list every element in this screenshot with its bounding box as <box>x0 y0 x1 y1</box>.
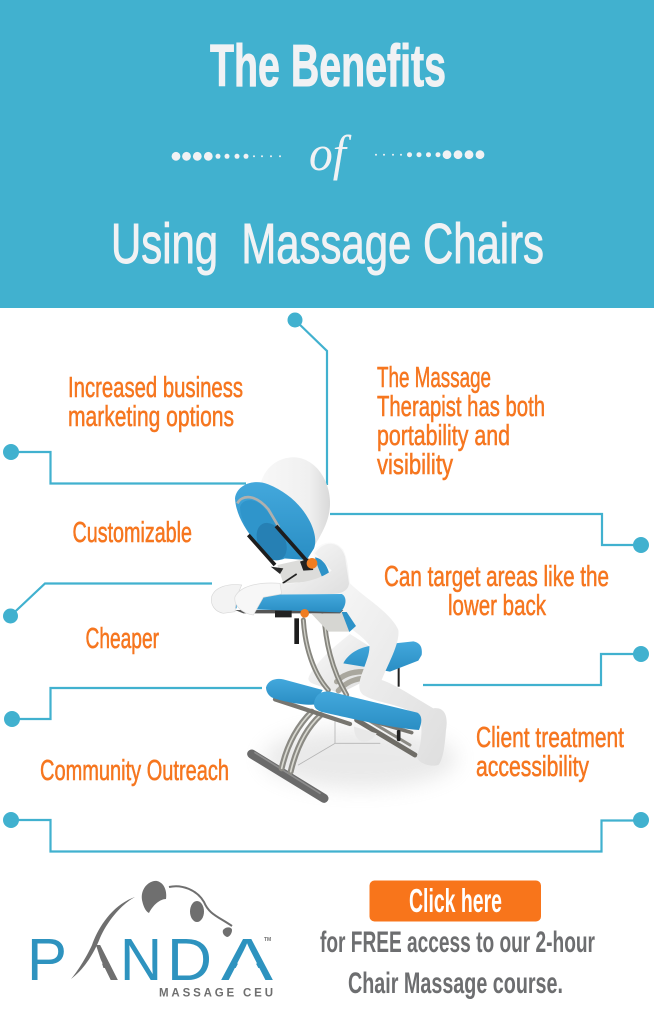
label: Cheaper: Cheaper <box>86 623 159 655</box>
logo wordmark: A <box>68 927 119 993</box>
label: Client treatment accessibility <box>476 722 624 783</box>
figure torso and near leg <box>313 543 447 766</box>
near arm <box>280 544 349 595</box>
button: Click here: Click here <box>409 882 502 919</box>
call to action <box>320 880 595 1000</box>
seat pad <box>343 641 422 687</box>
logo: Panda Massage CEU <box>27 881 274 1000</box>
logo trademark: TM <box>264 937 271 943</box>
upper chair tubes <box>297 613 365 695</box>
head cradle <box>235 482 315 566</box>
chest pad <box>312 612 356 632</box>
script word: of: of <box>309 125 352 181</box>
illustration: figure on massage chair <box>211 457 457 798</box>
far leg of figure <box>308 634 370 693</box>
hands <box>211 583 282 615</box>
dotted divider right <box>375 150 484 159</box>
label: Massage Therapist portability: portability and <box>377 420 510 452</box>
label: Massage Therapist portability <box>377 362 545 481</box>
label: Massage Therapist portability: The Massage <box>377 362 491 394</box>
floor shadow <box>263 728 457 788</box>
label: Community Outreach: Community Outreach <box>40 755 229 787</box>
label: Increased business marketing options <box>68 372 243 433</box>
knee pads <box>266 679 421 730</box>
title: The Benefits: The Benefits <box>210 33 446 99</box>
logo tagline: MASSAGE CEU <box>159 988 273 1000</box>
label: Increased business marketing options: marketing options <box>68 401 234 433</box>
logo wordmark: P <box>27 927 67 993</box>
head <box>260 457 330 545</box>
arm rest <box>224 592 345 618</box>
logo wordmark: A <box>221 927 274 993</box>
logo wordmark <box>32 939 273 980</box>
label: Can target areas <box>384 561 609 622</box>
label: Client treatment accessibility: accessibility <box>476 751 590 783</box>
label: Can target areas: lower back <box>448 590 547 622</box>
label: Massage Therapist portability: Therapist has both <box>377 391 545 423</box>
chair clamp <box>271 557 331 583</box>
label: Customizable: Customizable <box>72 517 192 549</box>
course offer text <box>320 926 595 1000</box>
header banner <box>0 0 654 308</box>
lower chair frame <box>252 699 415 798</box>
benefit labels <box>40 362 624 787</box>
label: Massage Therapist portability: visibility <box>377 449 454 481</box>
logo panda outline <box>71 881 232 979</box>
dotted divider left <box>172 152 281 161</box>
button: Click here <box>370 880 541 922</box>
logo wordmark: N <box>120 927 162 993</box>
connector lines <box>3 312 649 852</box>
label: Increased business marketing options: Increased business <box>68 372 243 404</box>
logo wordmark: D <box>167 927 212 993</box>
